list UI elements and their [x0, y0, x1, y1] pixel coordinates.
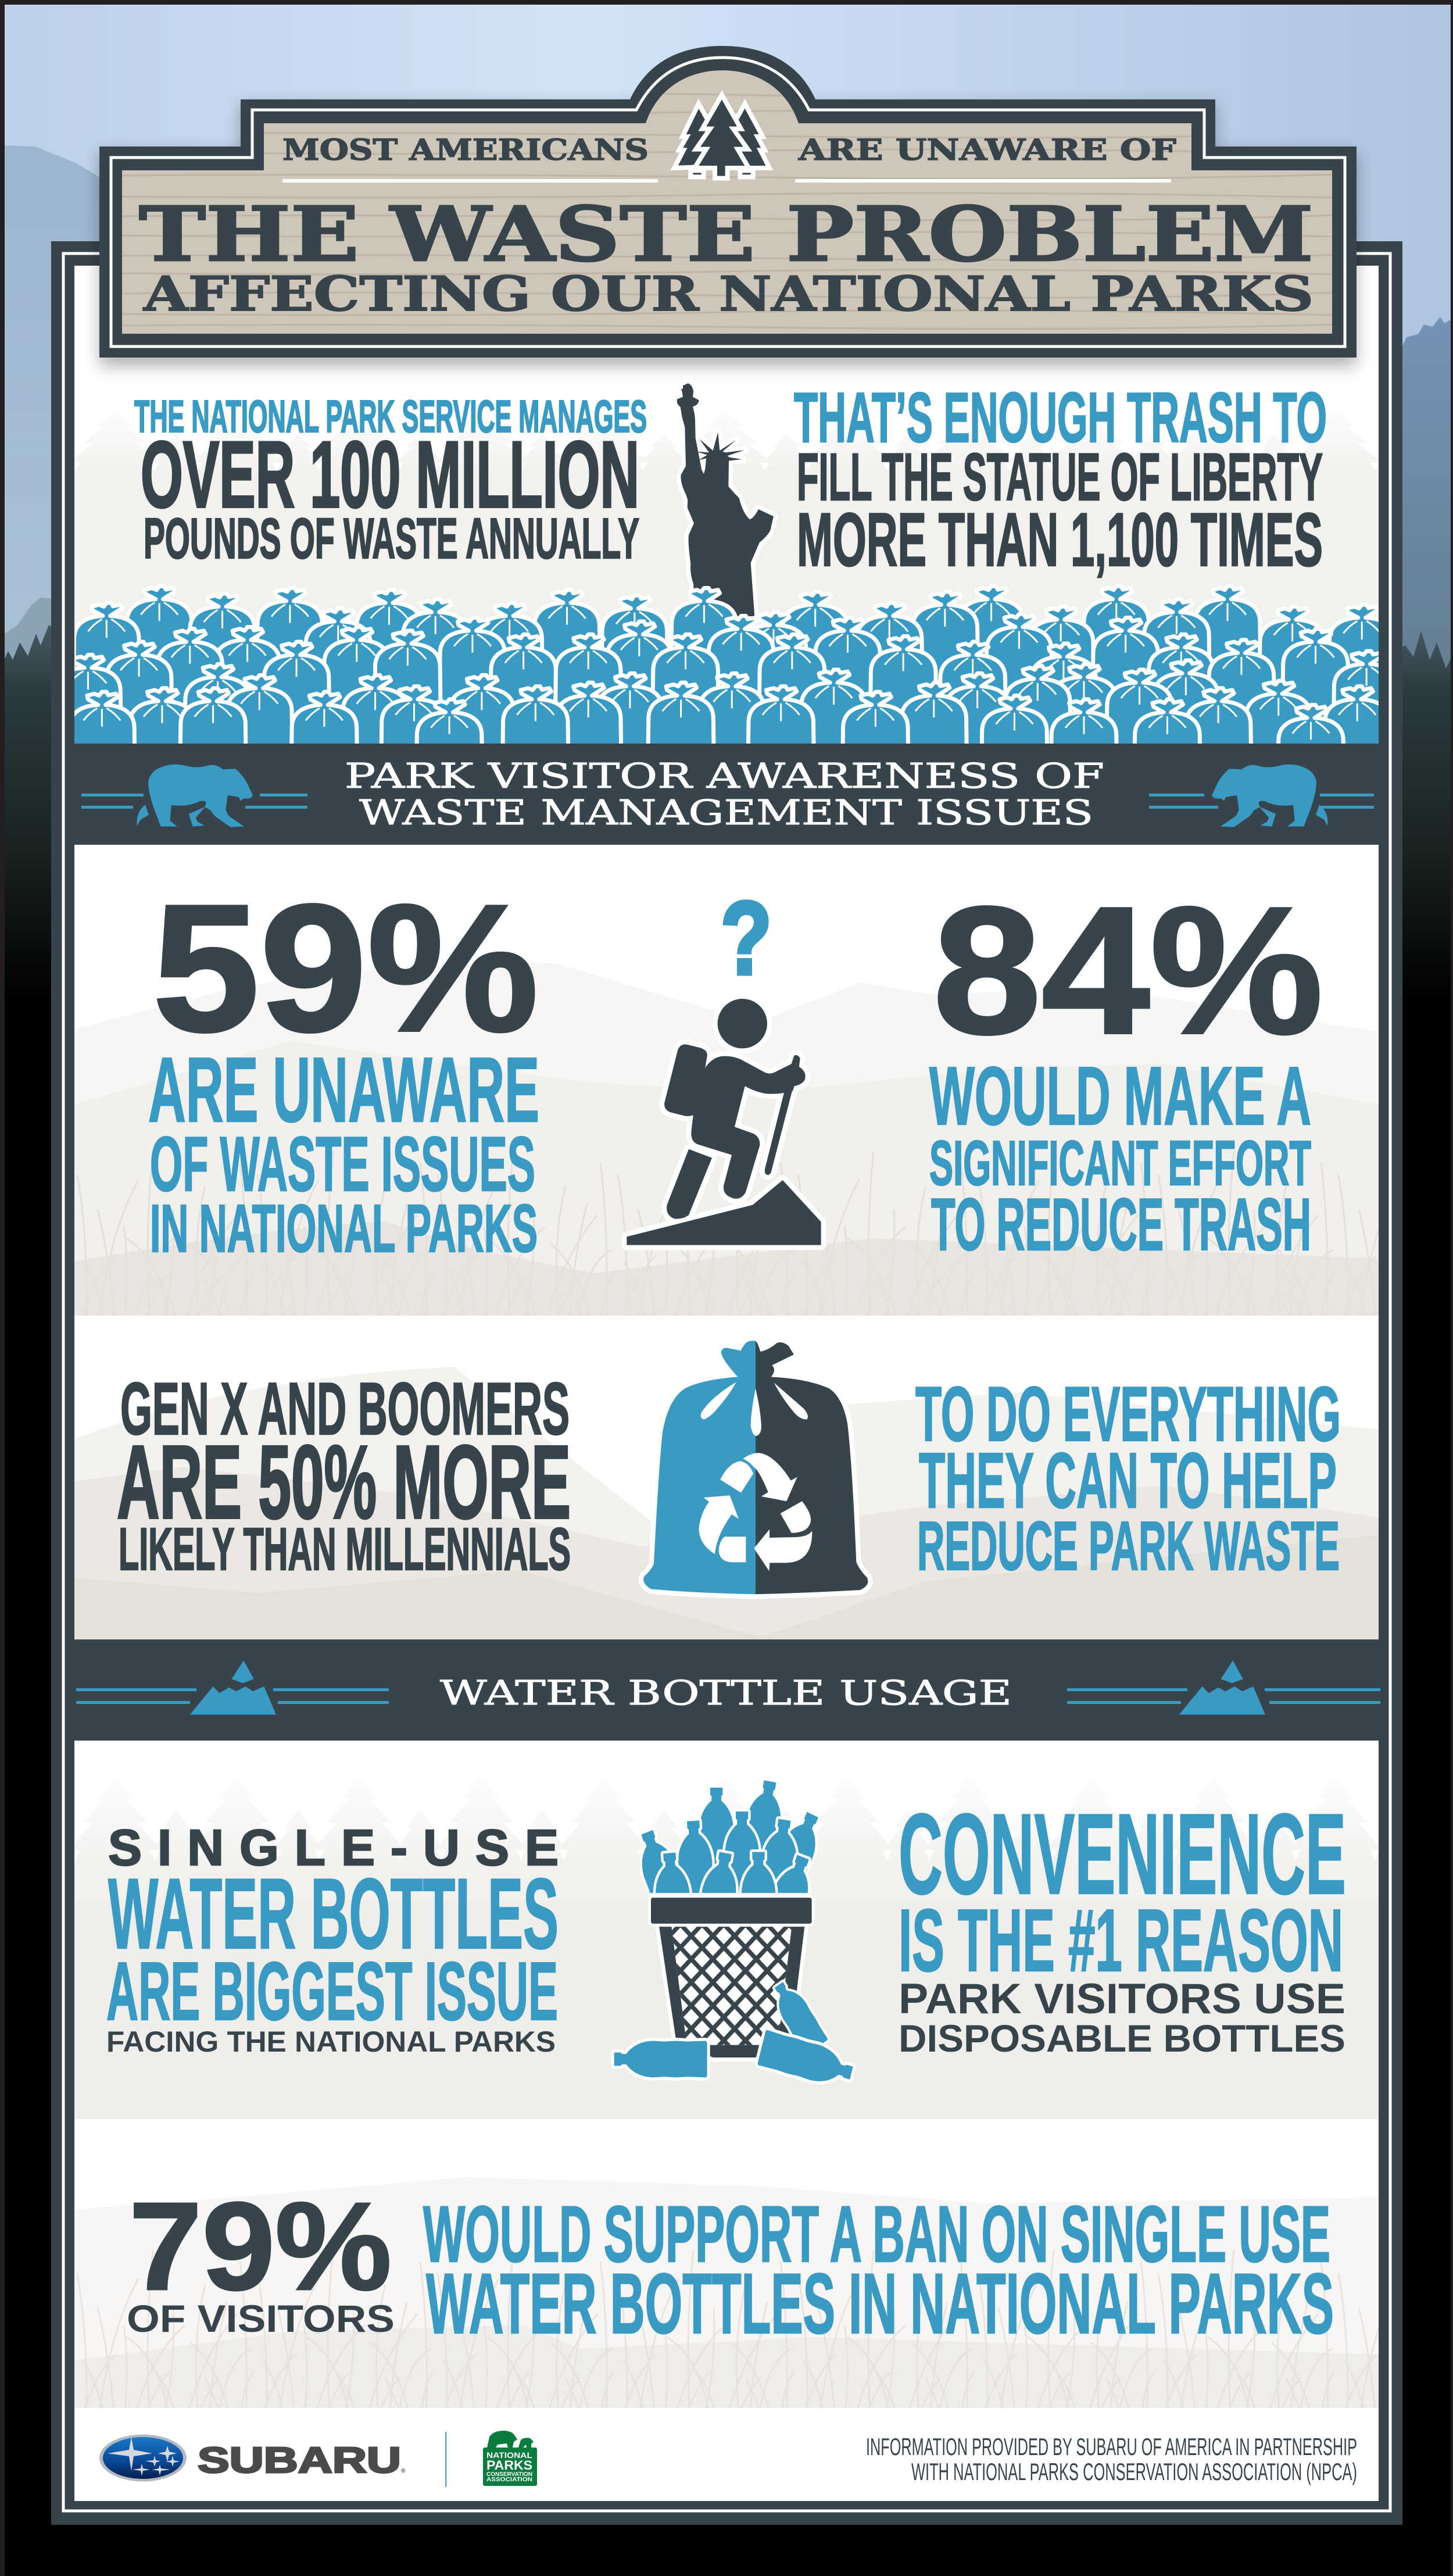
icon: left bear with lines — [81, 764, 307, 827]
icon: statue of liberty — [677, 383, 774, 616]
text: convenience is the number one reason: DISPOSABLE BOTTLES — [899, 2017, 1345, 2060]
text: manages over 100 million pounds — [134, 391, 647, 570]
icon: three pine trees — [674, 95, 770, 178]
stat: 79 percent of visitors: 79% — [129, 2176, 392, 2316]
text: gen x and boomers: LIKELY THAN MILLENNIALS — [119, 1516, 571, 1582]
stat: 59 percent: 59% — [152, 867, 539, 1070]
text: enough trash to fill the statue of liberty — [794, 378, 1327, 582]
text: single-use water bottles — [106, 1820, 559, 2058]
icon: question mark: ? — [721, 880, 772, 996]
logo: subaru wordmark: SUBARU — [198, 2441, 401, 2481]
panel: national park service waste — [74, 383, 1379, 744]
icon: two-tone recycling trash bag — [643, 1341, 868, 1594]
section banner: water bottle usage: WATER BOTTLE USAGE — [440, 1673, 1012, 1713]
illustration: pile of trash bags — [53, 586, 1401, 891]
logo: national parks conservation association: PARKS — [486, 2458, 532, 2473]
panel: generational comparison — [74, 1316, 1379, 1639]
text: manages over 100 million pounds: POUNDS OF WASTE ANNUALLY — [144, 506, 639, 570]
heading: affecting our national parks: AFFECTING OUR NATIONAL PARKS — [143, 267, 1314, 322]
panel: support for a bottle ban — [74, 2119, 1379, 2408]
text: would make a significant effort — [929, 1050, 1311, 1266]
stat: 79 percent of visitors: OF VISITORS — [127, 2297, 395, 2340]
footer: logos and credit — [74, 2408, 1379, 2501]
text: single-use water bottles: WATER BOTTLES — [108, 1858, 559, 1970]
section banner: park visitor awareness: PARK VISITOR AWARENESS OF — [345, 756, 1104, 796]
text: are unaware of waste issues: ARE UNAWARE — [148, 1039, 539, 1141]
text: source credit — [866, 2433, 1357, 2485]
logo: national parks conservation association: ASSOCIATION — [486, 2477, 532, 2483]
text: are unaware of waste issues — [148, 1039, 539, 1266]
text: gen x and boomers: GEN X AND BOOMERS — [120, 1367, 570, 1450]
icon: left mountain with lines — [76, 1660, 389, 1714]
heading: most americans are unaware of: ARE UNAWARE OF — [798, 133, 1176, 167]
heading: most americans are unaware of — [282, 133, 1176, 183]
logo: subaru oval — [99, 2435, 187, 2481]
logo: subaru wordmark: ® — [401, 2468, 406, 2474]
text: convenience is the number one reason: PARK VISITORS USE — [899, 1975, 1345, 2023]
text: single-use water bottles: FACING THE NATIONAL PARKS — [106, 2025, 556, 2058]
logo: national parks conservation association: CONSERVATION — [486, 2471, 532, 2478]
section banner: park visitor awareness — [74, 744, 1379, 845]
section banner: park visitor awareness: WASTE MANAGEMENT ISSUES — [359, 792, 1093, 833]
heading: the waste problem: THE WASTE PROBLEM — [139, 191, 1314, 278]
divider — [445, 2432, 446, 2487]
icon: hiker on a mountain — [627, 999, 821, 1245]
header sign: wooden park sign — [99, 46, 1357, 366]
text: manages over 100 million pounds: THE NATIONAL PARK SERVICE MANAGES — [134, 391, 647, 442]
text: are unaware of waste issues: OF WASTE ISSUES — [150, 1121, 535, 1207]
icon: right mountain with lines — [1067, 1660, 1380, 1714]
logo: national parks conservation association — [483, 2431, 537, 2486]
section banner: water bottle usage — [74, 1639, 1380, 1741]
text: single-use water bottles: ARE BIGGEST ISSUE — [106, 1945, 558, 2038]
icon: fallen bottles — [614, 1977, 856, 2091]
text: are unaware of waste issues: IN NATIONAL PARKS — [150, 1191, 538, 1266]
panel: single-use bottles and convenience — [74, 1777, 1379, 2119]
text: manages over 100 million pounds: OVER 100 MILLION — [141, 422, 639, 527]
text: to do everything they can — [915, 1371, 1341, 1585]
icon: wastebasket overflowing with bottles — [614, 1778, 856, 2091]
icon: bottles in basket — [639, 1780, 821, 1893]
text: gen x and boomers — [117, 1367, 571, 1582]
logo: national parks conservation association: NATIONAL — [486, 2450, 532, 2460]
stat: 84 percent: 84% — [933, 870, 1323, 1072]
icon: right bear with lines — [1149, 764, 1374, 827]
text: convenience is the number one reason — [899, 1790, 1346, 2060]
text: would support a ban — [423, 2190, 1334, 2352]
text: single-use water bottles: SINGLE-USE — [108, 1820, 559, 1876]
panel: visitor awareness stats — [74, 867, 1379, 1316]
heading: most americans are unaware of: MOST AMERICANS — [282, 133, 649, 167]
text: gen x and boomers: ARE 50% MORE — [117, 1424, 571, 1540]
